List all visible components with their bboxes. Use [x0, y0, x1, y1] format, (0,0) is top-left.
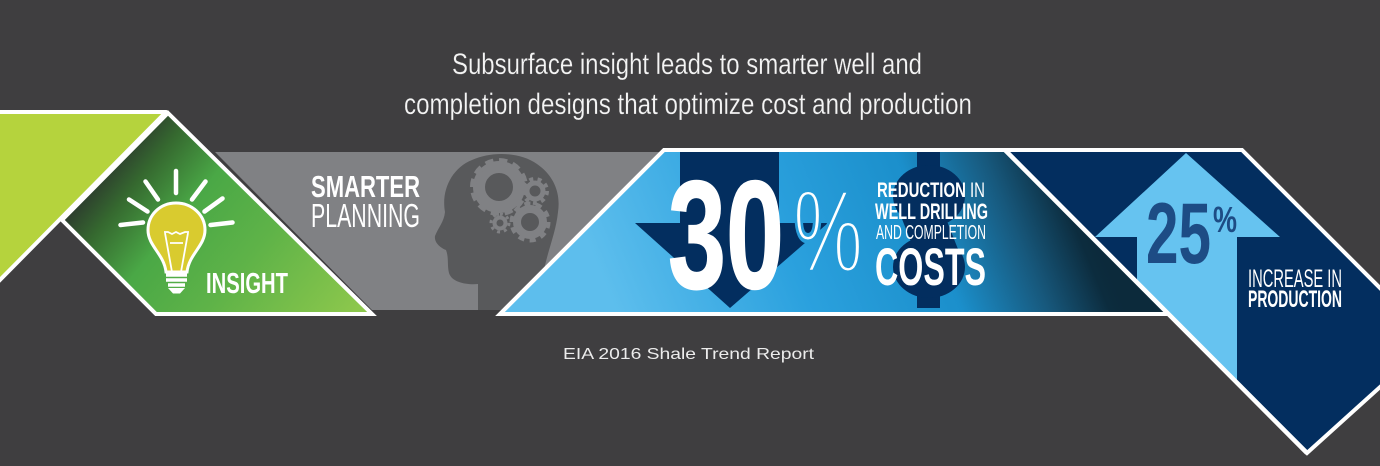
- icon: head with gears: [435, 154, 559, 310]
- icon: down arrow: [635, 152, 828, 308]
- icon: dollar sign: [893, 152, 965, 308]
- title: completion designs that optimize cost and production: [404, 88, 972, 121]
- label: reduction in well drilling and completion costs: COSTS: [875, 238, 986, 297]
- panel: lime chevron: [0, 112, 166, 290]
- heading: smarter planning: SMARTER: [311, 169, 420, 204]
- value: 25 percent: 25: [1146, 186, 1211, 282]
- title: [404, 48, 972, 121]
- panel: 25 percent increase: [1005, 150, 1380, 453]
- heading: smarter planning: [311, 169, 420, 234]
- label: reduction in well drilling and completion costs: WELL DRILLING: [875, 199, 988, 224]
- label: insight: INSIGHT: [206, 268, 288, 300]
- value: 30 percent: 30: [668, 149, 784, 321]
- panel: smarter planning: [215, 152, 665, 310]
- label: increase in production: [1248, 265, 1342, 313]
- panel: 30 percent reduction: [500, 149, 1172, 321]
- value: 25 percent: %: [1213, 199, 1237, 240]
- label: reduction in well drilling and completion costs: [875, 179, 988, 297]
- label: reduction in well drilling and completion costs: REDUCTION IN: [877, 179, 985, 202]
- panel: insight: [62, 113, 372, 314]
- icon: light bulb: [120, 171, 232, 294]
- white diagonal edge: [1005, 150, 1307, 453]
- title: Subsurface insight leads to smarter well and: [452, 48, 922, 81]
- label: reduction in well drilling and completion costs: AND COMPLETION: [876, 222, 986, 244]
- value: 30 percent: %: [793, 166, 863, 298]
- icon: up arrow: [1095, 153, 1280, 383]
- source note: EIA 2016 Shale Trend Report: [563, 346, 815, 363]
- heading: smarter planning: PLANNING: [311, 197, 420, 234]
